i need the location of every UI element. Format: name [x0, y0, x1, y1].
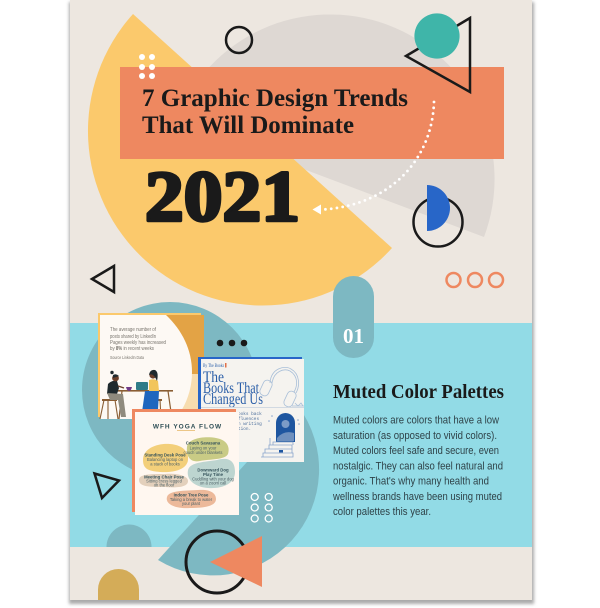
card headline — [203, 369, 263, 408]
title: 7 Graphic Design Trends — [142, 85, 408, 112]
illustration: two people at table — [100, 370, 173, 419]
dotted arrow — [312, 102, 434, 214]
section body text: nostalgic. They can also feel natural and — [333, 460, 503, 472]
blob: downward dog — [188, 459, 235, 488]
blob: downward dog: on a zoom call — [200, 480, 226, 486]
card: The Books That Changed Us — [198, 357, 304, 462]
grey semicircle — [176, 14, 495, 237]
card body mono text: ooks back — [238, 412, 262, 417]
section body text: wellness brands have been using muted — [332, 491, 502, 503]
blob: indoor tree pose: Indoor Tree Pose — [174, 492, 209, 498]
page background — [70, 0, 532, 600]
blob: couch savasana: Laying on your — [190, 446, 217, 450]
blob: couch savasana: couch under blankets — [184, 450, 222, 455]
section body text: organic. That's why many health and — [333, 476, 489, 488]
card: LinkedIn posts — [98, 313, 204, 419]
card text: Pages weekly has increased — [110, 340, 166, 346]
card text: The average number of — [110, 327, 156, 333]
icon: headphones — [259, 367, 304, 408]
black ring bottom — [186, 531, 248, 593]
card body mono text: n writing — [238, 422, 262, 427]
card brand: By The Books — [203, 363, 224, 369]
yellow semicircle — [88, 14, 392, 306]
orange rings — [446, 273, 503, 287]
small teal half circle — [106, 524, 152, 547]
blob: meeting chair pose — [139, 474, 188, 488]
blob: downward dog: Cuddling with your dog — [192, 476, 235, 482]
blob: meeting chair pose: on the floor — [154, 482, 175, 488]
title — [142, 85, 408, 139]
teal circle behind cards — [82, 302, 258, 478]
black ring right — [414, 198, 462, 246]
card text: by 8% in recent weeks — [110, 346, 154, 352]
section body text — [332, 414, 503, 518]
blob: indoor tree pose — [167, 490, 216, 508]
card body mono text: fluences — [238, 417, 259, 422]
blob: couch savasana — [184, 437, 229, 461]
section heading: Muted Color Palettes — [333, 381, 504, 403]
section body text: saturation (as opposed to vivid colors). — [333, 430, 497, 442]
blob: meeting chair pose: Sitting cross legged — [146, 478, 183, 484]
mustard arch — [98, 569, 139, 600]
blob: indoor tree pose: your plant — [182, 501, 201, 506]
title: That Will Dominate — [142, 112, 354, 139]
blob: meeting chair pose: Meeting Chair Pose — [144, 474, 185, 480]
blob: couch savasana: Couch Savasana — [186, 440, 221, 446]
card title: WFH YOGA FLOW — [153, 424, 222, 430]
blob: standing desk pose: Balancing laptop on — [147, 457, 184, 462]
card text: Source LinkedIn Data — [110, 355, 144, 361]
number pill — [333, 276, 374, 358]
outline triangle top right — [406, 18, 470, 92]
blob: standing desk pose: Standing Desk Pose — [144, 452, 186, 458]
blob: standing desk pose: a stack of books — [150, 462, 180, 466]
teal circle — [414, 13, 460, 59]
card: WFH Yoga Flow — [132, 409, 239, 515]
title banner — [120, 67, 504, 159]
orange triangle — [210, 536, 262, 587]
outline triangle lower — [94, 474, 119, 498]
blue band — [70, 323, 532, 547]
white ring grid — [251, 494, 272, 522]
blob: downward dog: Play Time — [203, 472, 224, 477]
card text — [110, 327, 166, 361]
blob: standing desk pose — [143, 444, 188, 472]
section body text: color palettes this year. — [333, 506, 431, 518]
illustration: arch portrait and stairs — [261, 413, 300, 457]
card body mono text — [238, 412, 262, 432]
blob: indoor tree pose: Taking a break to water — [170, 497, 213, 502]
black ring top — [226, 27, 252, 53]
section body text: Muted colors feel safe and secure, even — [333, 445, 499, 457]
blue half circle — [427, 185, 450, 231]
card headline: The — [203, 369, 224, 386]
card body mono text: tion. — [238, 427, 251, 432]
card headline: Changed Us — [203, 391, 263, 408]
year 2021: 2021 — [145, 156, 300, 236]
black dots — [217, 340, 247, 346]
teal semicircle lower — [158, 406, 319, 575]
card text: posts shared by LinkedIn — [110, 334, 156, 340]
section body text: Muted colors are colors that have a low — [333, 414, 499, 426]
number pill: 01 — [343, 324, 364, 348]
outline triangle left — [92, 266, 114, 292]
blob: downward dog: Downward Dog — [197, 468, 229, 472]
card headline: Books That — [203, 380, 259, 397]
icon: white dot grid — [139, 54, 155, 79]
